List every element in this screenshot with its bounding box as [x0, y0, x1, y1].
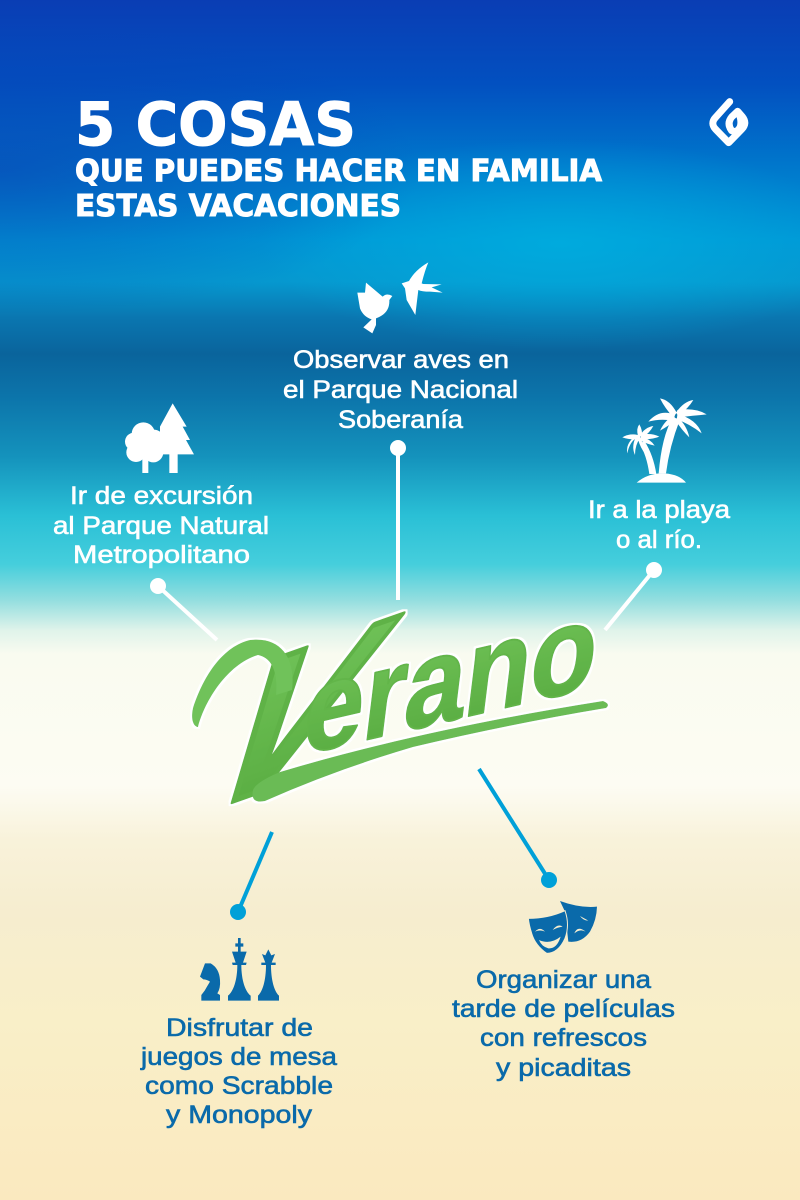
text: board games: Disfrutar de [166, 1014, 313, 1042]
text: birds: el Parque Nacional [283, 376, 518, 404]
icon: brand logo [713, 102, 745, 143]
lettering: Verano: V [156, 566, 431, 868]
icon: birds [357, 262, 443, 333]
text: movies: y picaditas [496, 1054, 631, 1082]
connector: board games [230, 832, 272, 920]
text: beach: Ir a la playa [588, 496, 730, 524]
connector: hiking [150, 578, 217, 640]
text: beach [588, 496, 730, 554]
icon: trees [125, 403, 194, 473]
connector: birds [390, 440, 406, 600]
text: board games: como Scrabble [145, 1072, 333, 1100]
text: movies: tarde de películas [452, 995, 675, 1023]
icon: theatre masks [528, 901, 597, 953]
icon: palm trees [622, 398, 707, 483]
connector: movies [479, 769, 557, 888]
text: movies: Organizar una [476, 966, 651, 994]
text: board games: y Monopoly [166, 1101, 313, 1129]
swash underline [252, 701, 608, 802]
text: hiking: Metropolitano [73, 541, 250, 569]
text: board games [140, 1014, 337, 1129]
text: movies [452, 966, 675, 1082]
title [75, 90, 603, 224]
text: hiking [53, 482, 269, 569]
title: 5 COSAS [75, 90, 356, 160]
connector: beach [605, 562, 662, 630]
text: board games: juegos de mesa [140, 1043, 337, 1071]
icon: chess pieces [200, 938, 279, 1001]
text: beach: o al río. [616, 526, 702, 554]
text: hiking: Ir de excursión [70, 482, 253, 510]
text: birds [283, 346, 518, 434]
text: movies: con refrescos [480, 1024, 647, 1052]
lettering: Verano: erano [297, 574, 606, 783]
text: birds: Observar aves en [293, 346, 509, 374]
flourish of the V [192, 640, 293, 727]
text: hiking: al Parque Natural [53, 512, 269, 540]
text: birds: Soberanía [338, 406, 463, 434]
lettering: Verano [156, 566, 608, 868]
title: QUE PUEDES HACER EN FAMILIA [75, 154, 603, 189]
title: ESTAS VACACIONES [75, 189, 401, 224]
